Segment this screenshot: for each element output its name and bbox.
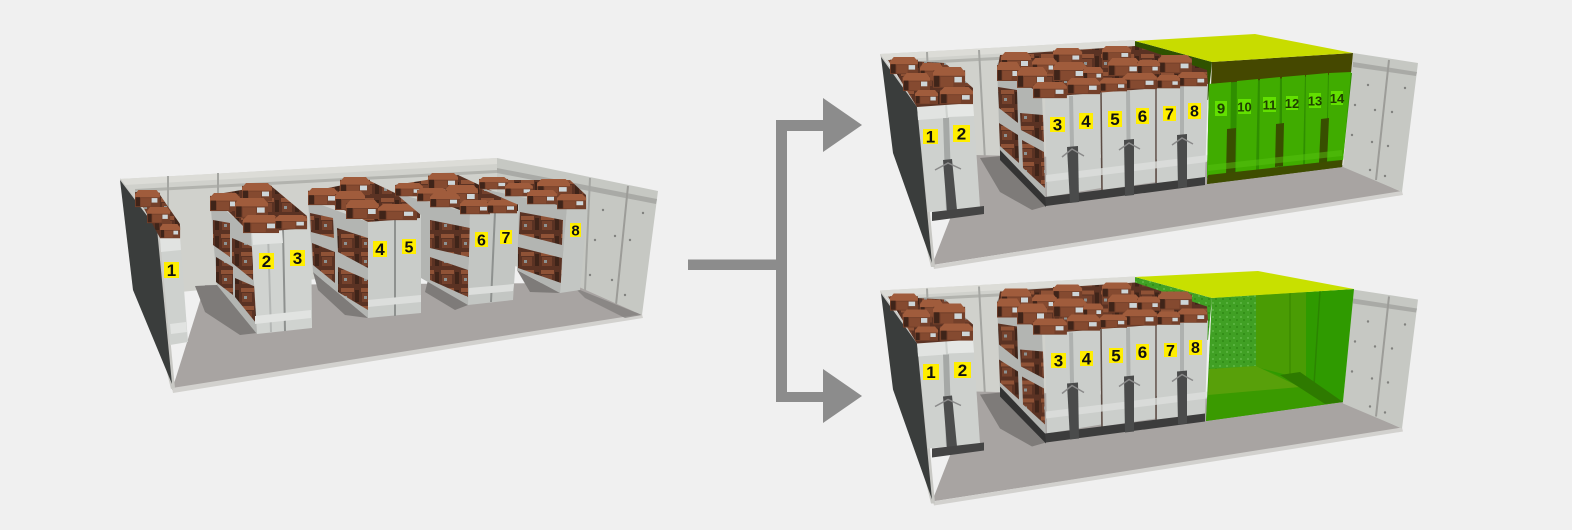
room walls and floor xyxy=(120,158,658,393)
number labels, green zone: 9 xyxy=(1217,100,1225,118)
number labels, existing shelves: 8 xyxy=(1190,104,1199,120)
green zone rear side xyxy=(1135,277,1212,340)
scene: current room with static shelving xyxy=(120,158,658,393)
number labels, existing shelves: 8 xyxy=(1191,340,1200,357)
scene: option with empty green expansion zone xyxy=(880,271,1418,506)
shelf shadows xyxy=(195,270,642,335)
number labels, green zone xyxy=(1215,91,1345,118)
green zone with shelves 9 to 14 xyxy=(1135,34,1353,184)
shelving unit 2-3 xyxy=(210,183,312,334)
number labels, current room: 2 xyxy=(262,252,271,271)
shelving unit 6-7 xyxy=(395,173,519,305)
shelving unit 8 xyxy=(479,177,588,293)
room walls and floor xyxy=(880,40,1418,269)
number labels, green zone: 12 xyxy=(1285,96,1299,111)
number labels, existing shelves: 4 xyxy=(1082,350,1092,368)
number labels, existing shelves: 6 xyxy=(1138,107,1147,126)
number labels, existing shelves: 2 xyxy=(958,361,967,380)
number labels, existing shelves: 7 xyxy=(1165,106,1174,124)
number labels, existing shelves: 5 xyxy=(1110,110,1120,129)
existing shelving units 1 to 8 xyxy=(888,282,1208,458)
green zone roof xyxy=(1135,34,1353,62)
shelving unit 4-5 xyxy=(308,177,421,318)
number labels, existing shelves: 3 xyxy=(1054,352,1063,370)
number labels, green zone: 10 xyxy=(1237,100,1252,114)
scene: option with additional shelving in green expansion zone xyxy=(880,34,1418,269)
number labels, current room xyxy=(164,222,581,280)
existing shelving units 1 to 8 xyxy=(888,46,1208,221)
room walls and floor xyxy=(880,276,1418,506)
number labels, existing shelves: 7 xyxy=(1166,343,1175,360)
green zone rear side xyxy=(1135,41,1212,100)
shelving unit 1 xyxy=(135,190,188,345)
number labels, existing shelves: 1 xyxy=(926,363,936,382)
number labels, green zone: 14 xyxy=(1330,91,1345,106)
number labels, existing shelves: 6 xyxy=(1138,343,1147,362)
number labels, current room: 6 xyxy=(477,232,486,250)
branching arrow xyxy=(688,98,862,423)
empty green zone xyxy=(1135,271,1354,421)
number labels, existing shelves: 3 xyxy=(1053,116,1062,134)
number labels, existing shelves: 1 xyxy=(926,128,935,146)
number labels, current room: 1 xyxy=(167,261,176,280)
number labels, current room: 4 xyxy=(375,240,385,259)
number labels, current room: 3 xyxy=(293,249,302,268)
number labels, current room: 7 xyxy=(502,230,511,247)
number labels, existing shelves xyxy=(923,340,1202,382)
number labels, existing shelves: 5 xyxy=(1111,346,1121,366)
green zone roof xyxy=(1135,271,1354,298)
number labels, existing shelves: 2 xyxy=(957,124,966,144)
number labels, existing shelves: 4 xyxy=(1081,112,1091,131)
number labels, green zone: 11 xyxy=(1263,98,1276,112)
number labels, green zone: 13 xyxy=(1308,94,1322,108)
number labels, current room: 8 xyxy=(571,222,580,240)
number labels, current room: 5 xyxy=(405,240,414,256)
number labels, existing shelves xyxy=(923,103,1201,146)
